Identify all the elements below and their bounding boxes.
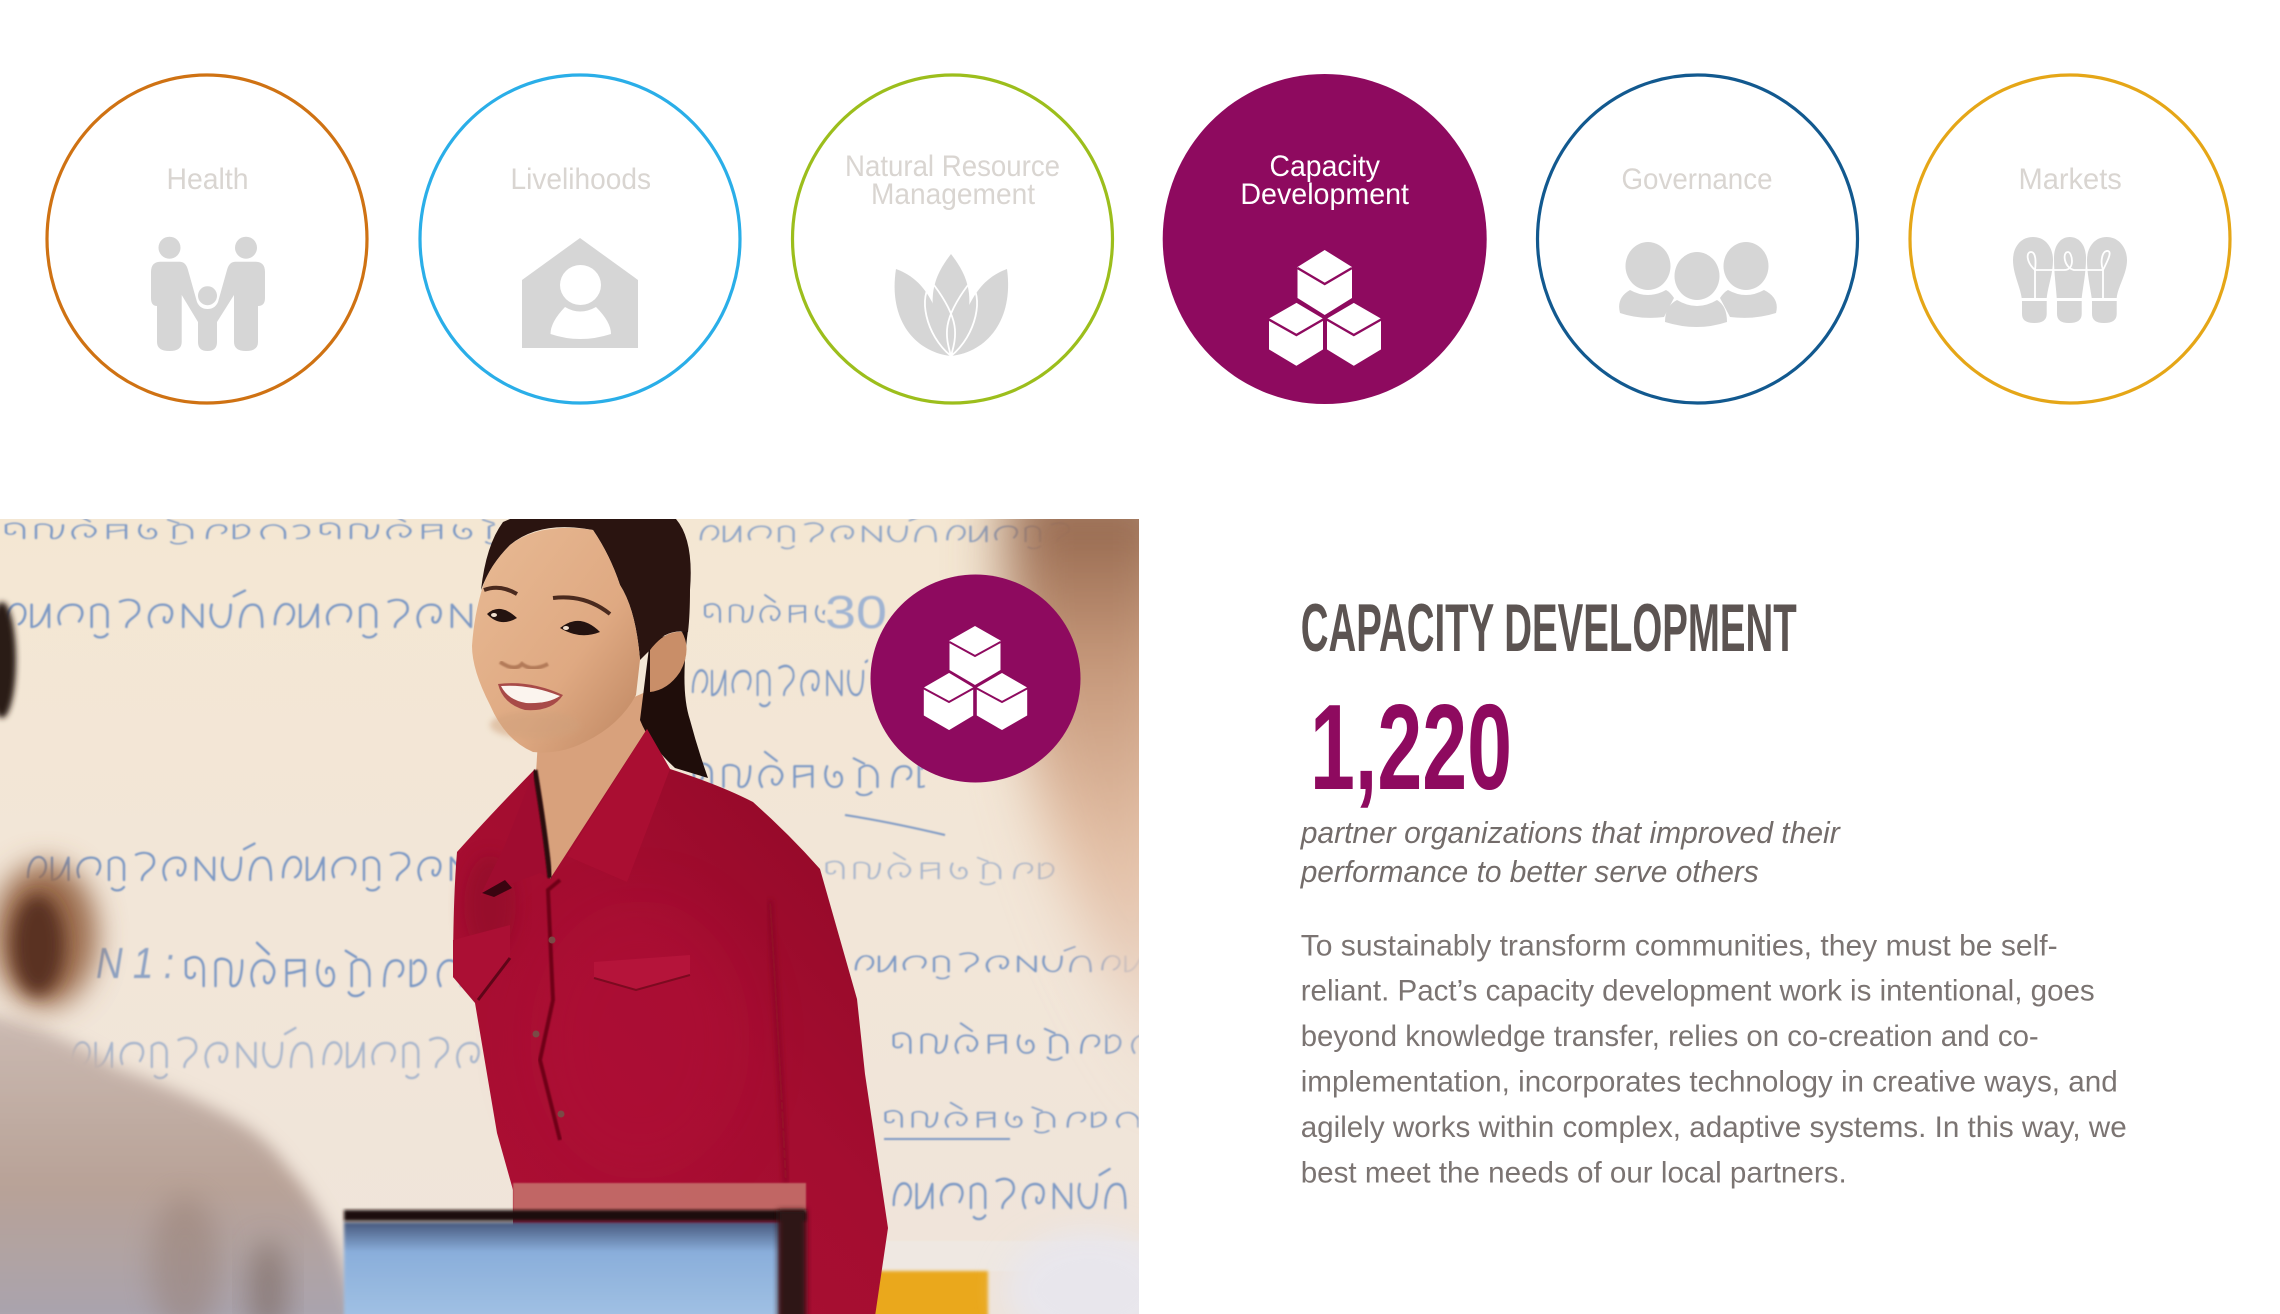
panel: focus area circles <box>47 74 2230 404</box>
statistic caption <box>1300 815 1841 889</box>
blurred foreground person: hair <box>0 602 97 1007</box>
eyebrows <box>484 588 610 614</box>
shoulder folds <box>150 1195 288 1314</box>
icon: lotus <box>895 254 1008 356</box>
handwriting on whiteboard: 30 <box>825 586 887 638</box>
neck <box>535 690 650 880</box>
ear <box>650 632 687 692</box>
icon: family holding hands <box>151 237 265 351</box>
face <box>472 528 640 753</box>
hair <box>481 519 691 660</box>
label: Health: Health <box>166 163 248 196</box>
label: Capacity Development: Capacity <box>1270 150 1380 183</box>
nose shadow <box>500 662 548 668</box>
body paragraph: agilely works within complex, adaptive systems. In this way, we <box>1301 1111 2127 1144</box>
whiteboard background <box>0 519 1139 1314</box>
label: Capacity Development <box>1240 150 1410 211</box>
icon: stacked cubes <box>923 626 1028 731</box>
shirt shading: highlights, placket, collar, pockets, buttons <box>453 729 786 1184</box>
handwriting on whiteboard: N 1 : <box>96 939 174 988</box>
body paragraph: beyond knowledge transfer, relies on co-creation and co- <box>1301 1020 2039 1053</box>
body paragraph: To sustainably transform communities, they must be self- <box>1301 930 2058 962</box>
circle: Capacity Development (active) <box>1163 74 1487 404</box>
blurred foreground person: shoulder <box>0 1013 364 1314</box>
cheek shading <box>488 716 534 740</box>
eyes <box>487 609 600 635</box>
label: Markets: Markets <box>2018 163 2122 196</box>
statistic caption: performance to better serve others <box>1300 854 1759 889</box>
big number: 1,220 <box>1310 679 1512 815</box>
label: Governance: Governance <box>1622 163 1772 196</box>
woman <box>453 519 888 1314</box>
red shirt <box>453 729 888 1314</box>
smile <box>498 683 563 710</box>
ponytail <box>640 630 708 778</box>
body paragraph <box>1301 930 2127 1190</box>
circle: Governance <box>1538 75 1858 403</box>
body paragraph: best meet the needs of our local partners. <box>1301 1156 1847 1190</box>
label: Natural Resource Management: Natural Resource <box>845 150 1060 183</box>
circle: Livelihoods <box>420 75 740 403</box>
body paragraph: reliant. Pact’s capacity development work is intentional, goes <box>1301 974 2095 1008</box>
icon: light bulbs <box>2013 237 2127 323</box>
board lower edge and yellow object <box>873 1230 1175 1314</box>
circle: Health <box>47 75 367 403</box>
label: Livelihoods: Livelihoods <box>510 163 651 196</box>
panel: capacity development text <box>1300 590 2127 1190</box>
label: Natural Resource Management <box>845 150 1060 211</box>
circle: Natural Resource Management <box>792 75 1112 403</box>
icon: stacked cubes <box>1268 250 1382 367</box>
badge: cubes icon on purple circle <box>870 574 1080 782</box>
body paragraph: implementation, incorporates technology in creative ways, and <box>1301 1066 2118 1098</box>
photo: woman teaching at whiteboard <box>0 480 1180 1314</box>
blurred head at right edge <box>964 519 1139 1054</box>
icon: person in house <box>522 238 638 348</box>
blurred laptop <box>344 1183 806 1314</box>
label: Capacity Development: Development <box>1240 178 1410 211</box>
icon: three people <box>1619 242 1777 327</box>
heading: CAPACITY DEVELOPMENT <box>1301 590 1797 666</box>
label: Natural Resource Management: Management <box>871 178 1036 211</box>
statistic caption: partner organizations that improved their <box>1300 815 1841 850</box>
handwriting on whiteboard <box>0 513 1140 1223</box>
circle: Markets <box>1910 75 2230 403</box>
